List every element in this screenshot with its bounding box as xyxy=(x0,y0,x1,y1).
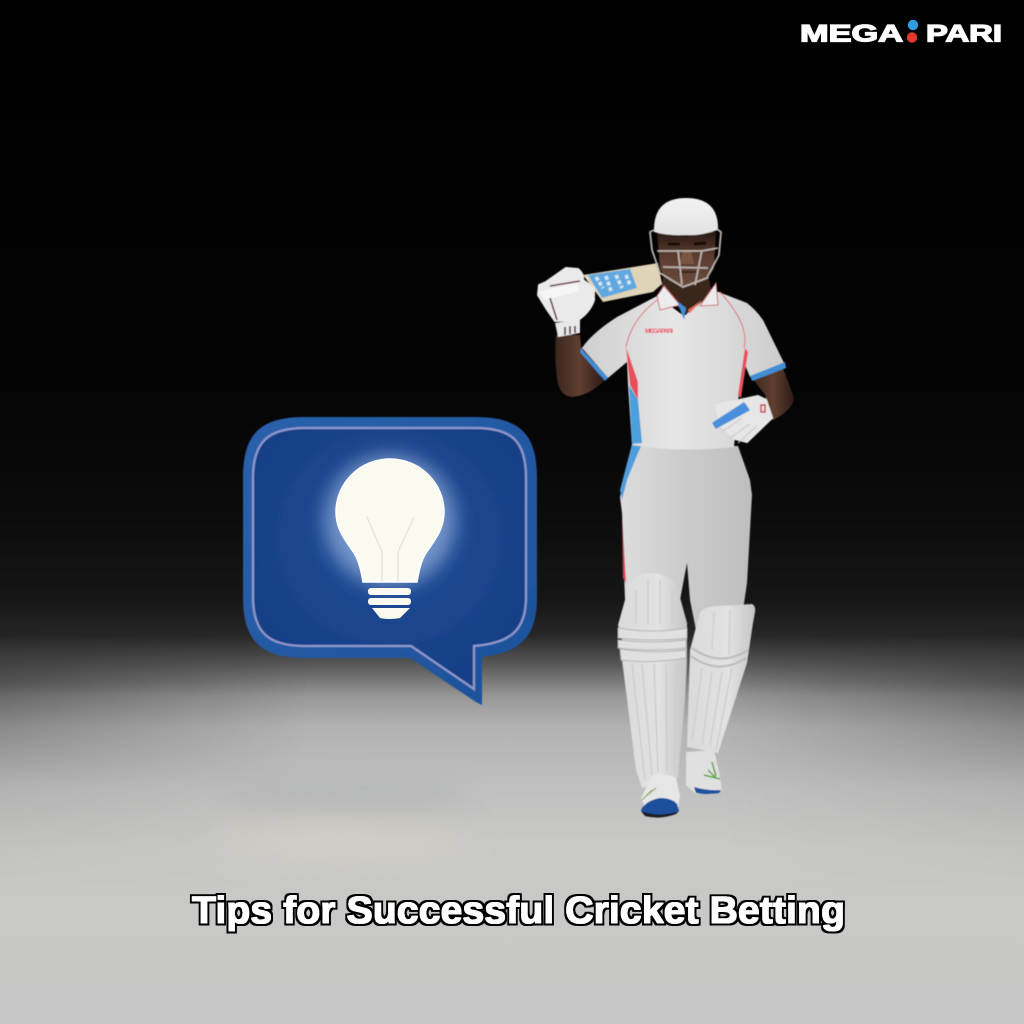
trousers xyxy=(620,445,752,650)
shoe: front left xyxy=(641,774,680,818)
left leg pad xyxy=(618,573,687,788)
brand logo: PARI xyxy=(926,20,1002,48)
neck xyxy=(660,272,712,314)
head and face xyxy=(657,232,716,286)
speech bubble with light bulb icon xyxy=(243,417,537,705)
right leg pad xyxy=(687,604,755,753)
brand logo: MEGA xyxy=(800,20,903,48)
sleeve and side trim xyxy=(580,292,786,444)
brand logo xyxy=(800,20,1002,48)
chest logo: MEGAPARI xyxy=(645,328,673,335)
speech bubble body xyxy=(243,417,537,705)
shirt xyxy=(580,283,786,450)
collar xyxy=(657,283,718,320)
icon: light bulb xyxy=(324,454,456,619)
helmet xyxy=(654,198,718,235)
title: Tips for Successful Cricket Betting xyxy=(192,890,845,932)
helmet face cage xyxy=(650,229,721,287)
cricket player xyxy=(538,198,794,818)
raised arm xyxy=(555,335,604,397)
bat xyxy=(583,263,662,302)
background gradient with floor xyxy=(0,457,1024,1024)
right glove xyxy=(713,396,772,443)
shoe: back right xyxy=(686,750,722,794)
lowered arm xyxy=(752,368,794,420)
logo dots xyxy=(907,20,918,43)
trouser side stripes xyxy=(620,444,641,583)
left glove on bat handle xyxy=(538,268,594,337)
